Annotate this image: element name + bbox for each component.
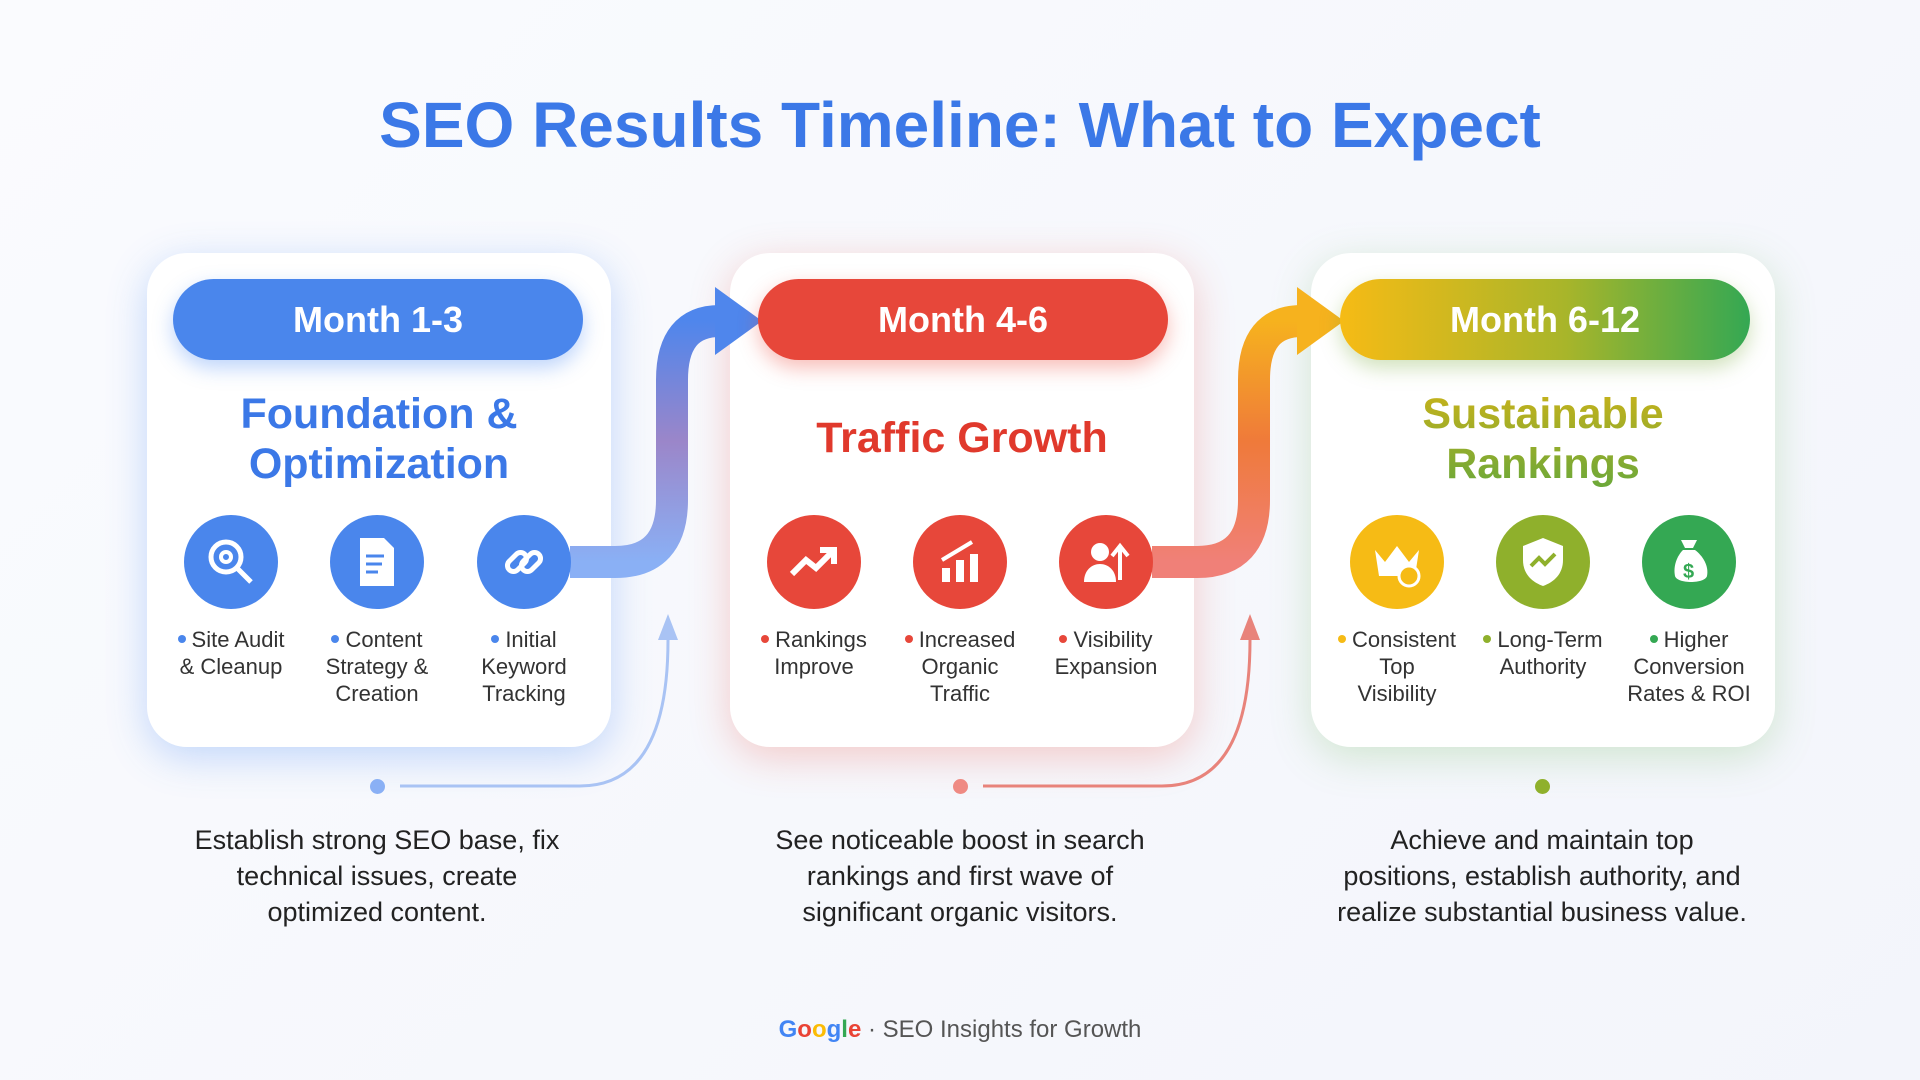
heading: sustainable: Rankings xyxy=(1446,440,1640,488)
text: Organic xyxy=(921,654,999,679)
text: Creation xyxy=(335,681,419,706)
text: Higher xyxy=(1664,627,1728,652)
text: Increased xyxy=(919,627,1015,652)
text: Long-Term xyxy=(1497,627,1603,652)
text: Content xyxy=(345,627,423,652)
panel: month 4-6 xyxy=(730,253,1194,747)
text: Authority xyxy=(1500,654,1586,679)
pill: Month 1-3 xyxy=(173,279,583,360)
title: SEO Results Timeline: What to Expect xyxy=(379,89,1541,161)
text: Keyword xyxy=(481,654,567,679)
text: Visibility xyxy=(1073,627,1153,652)
icon: visibility xyxy=(1059,515,1153,609)
description 3: Achieve and maintain top xyxy=(1390,825,1694,855)
pill: Month 6-12 xyxy=(1340,279,1750,360)
heading: foundation xyxy=(240,390,518,488)
text: Initial xyxy=(505,627,557,652)
text: Conversion xyxy=(1633,654,1745,679)
labels: panel 2: Improve xyxy=(774,654,854,679)
heading: sustainable xyxy=(1311,389,1775,489)
heading: foundation: Optimization xyxy=(249,440,509,488)
description 1: optimized content. xyxy=(267,897,487,927)
footer: Google · SEO Insights for Growth xyxy=(779,1016,1141,1043)
labels: panel 1 xyxy=(178,627,284,679)
icon: content xyxy=(330,515,424,609)
timeline dots xyxy=(370,779,385,794)
icon: keyword link xyxy=(477,515,571,609)
description 1 xyxy=(195,825,559,927)
text: Rates & ROI xyxy=(1627,681,1751,706)
labels: panel 1: & Cleanup xyxy=(180,654,282,679)
pill: Month 4-6: Month 4-6 xyxy=(878,298,1048,340)
pill: Month 1-3: Month 1-3 xyxy=(293,298,463,340)
description 3: realize substantial business value. xyxy=(1337,897,1747,927)
labels: panel 1: Site Audit xyxy=(192,627,284,652)
heading: foundation: Foundation & xyxy=(240,390,518,438)
labels: panel 3: Consistent xyxy=(1352,627,1456,652)
description 2 xyxy=(775,825,1145,927)
panel: month 1-3 xyxy=(147,253,611,747)
icon: money bag xyxy=(1642,515,1736,609)
description 1: technical issues, create xyxy=(237,861,517,891)
labels: panel 2 xyxy=(761,627,867,679)
description 1: Establish strong SEO base, fix xyxy=(195,825,559,855)
text: Traffic xyxy=(930,681,990,706)
icon: shield xyxy=(1496,515,1590,609)
labels: panel 3: Top xyxy=(1379,654,1415,679)
heading: traffic growth: Traffic Growth xyxy=(816,414,1108,462)
labels: panel 2: Rankings xyxy=(775,627,867,652)
icon: rankings xyxy=(767,515,861,609)
text: Expansion xyxy=(1055,654,1157,679)
heading: sustainable: Sustainable xyxy=(1422,390,1664,438)
pill: Month 6-12: Month 6-12 xyxy=(1450,298,1640,340)
description 2: rankings and first wave of xyxy=(807,861,1113,891)
description 3: positions, establish authority, and xyxy=(1343,861,1741,891)
description 2: See noticeable boost in search xyxy=(775,825,1145,855)
pill: Month 4-6 xyxy=(758,279,1168,360)
text: Strategy & xyxy=(326,654,428,679)
description 2: significant organic visitors. xyxy=(802,897,1118,927)
panel: month 6-12 xyxy=(1311,253,1775,747)
labels: panel 3 xyxy=(1338,627,1456,706)
icon: money bag: $ xyxy=(1683,561,1694,583)
icon: organic traffic xyxy=(913,515,1007,609)
icon: site audit xyxy=(184,515,278,609)
text: Tracking xyxy=(482,681,566,706)
description 3 xyxy=(1337,825,1747,927)
icon: crown xyxy=(1350,515,1444,609)
labels: panel 3: Visibility xyxy=(1357,681,1437,706)
